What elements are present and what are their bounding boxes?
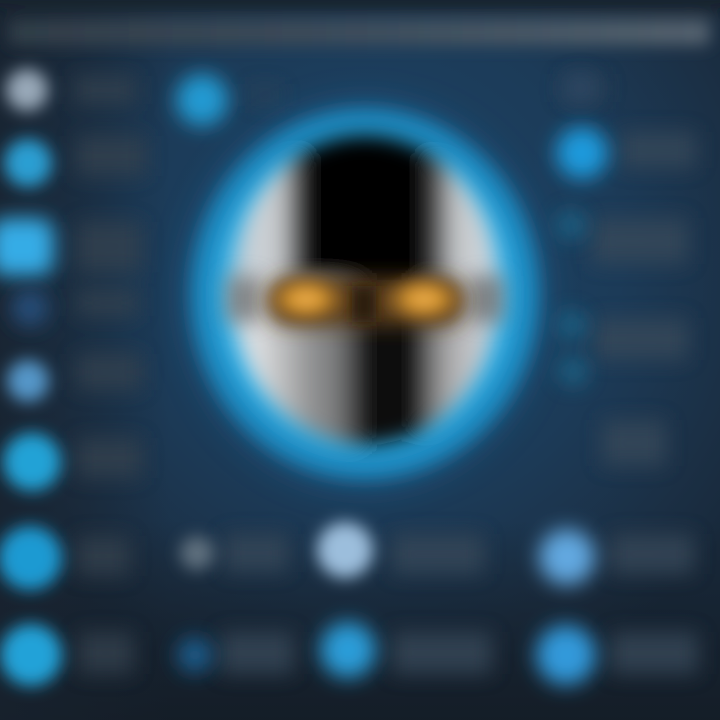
title bar — [0, 0, 720, 45]
icon: gray small dot — [180, 536, 214, 570]
left eye — [266, 275, 346, 323]
face shading — [225, 130, 505, 450]
panel: right and bottom text placeholders — [220, 74, 698, 674]
icon: central face — [183, 101, 547, 489]
icon: blue dot — [4, 139, 52, 187]
icon: blue dot center — [320, 622, 376, 678]
icon: right dim marks — [556, 73, 595, 386]
icon column: left blue dots — [0, 69, 62, 686]
icon: cyan dot — [3, 433, 61, 491]
icon: right blue dot — [556, 127, 608, 179]
icon: bottom row dots — [177, 522, 596, 685]
icon: bright blue tile — [0, 218, 54, 276]
icon: gray dot — [6, 69, 48, 111]
icon: top blue dot — [176, 74, 228, 126]
icon: dim blue dot — [11, 289, 49, 327]
icon: dim blue dot — [177, 637, 213, 673]
side shading — [226, 276, 504, 322]
icon: pale blue dot — [317, 522, 373, 578]
icon: cyan dot large — [0, 526, 62, 590]
icon: sky dot — [539, 529, 595, 585]
right eye — [384, 275, 464, 323]
icon: mid blue dot — [7, 360, 49, 402]
dark nose bridge — [352, 286, 376, 322]
blue ring — [190, 108, 540, 480]
panel: left column text placeholders — [74, 76, 146, 674]
icon: blue dot right — [536, 625, 596, 685]
glow — [183, 101, 547, 489]
brown mask band — [268, 278, 464, 326]
icon: cyan dot bottom — [0, 624, 62, 686]
